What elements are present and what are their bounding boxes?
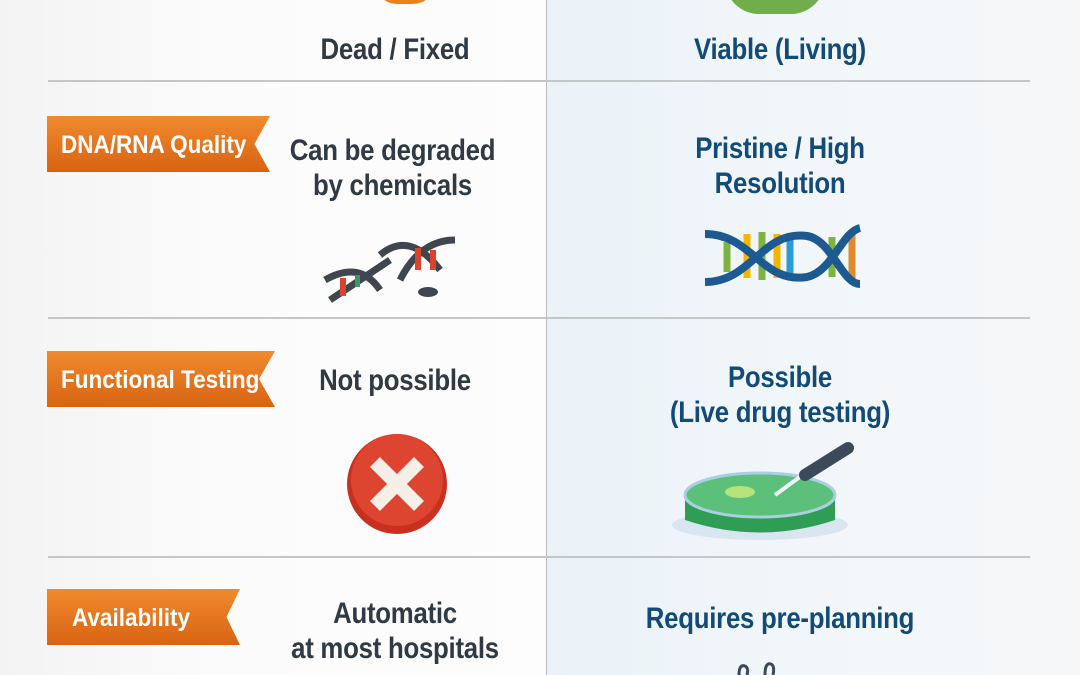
text: degraded <box>290 134 495 202</box>
text: pristine: Resolution <box>715 167 845 200</box>
icon: red X <box>347 434 447 534</box>
text: requires pre-planning: Requires pre-planning <box>646 602 914 635</box>
text: pristine <box>695 132 865 200</box>
text: possible <box>670 361 890 429</box>
text: dead / fixed: Dead / Fixed <box>321 33 469 66</box>
icon: green cell (top, cropped) <box>725 0 825 14</box>
text: not possible: Not possible <box>319 364 471 397</box>
text: degraded: Can be degraded <box>290 134 495 167</box>
icon: DNA <box>705 224 861 288</box>
label: DNA/RNA Quality <box>47 116 270 172</box>
text: viable: Viable (Living) <box>694 33 866 66</box>
text: pristine: Pristine / High <box>695 132 865 165</box>
label: Functional Testing <box>47 351 275 407</box>
icon: petri dish <box>672 442 854 540</box>
label: Availability <box>47 589 240 645</box>
left column background <box>0 0 546 675</box>
icon: partial puzzle (cropped) <box>738 662 776 675</box>
text: automatic <box>291 597 499 665</box>
icon: orange cell (top, cropped) <box>375 0 435 4</box>
text: possible: (Live drug testing) <box>670 396 890 429</box>
label: Functional Testing: Functional Testing <box>61 366 259 394</box>
label: Availability: Availability <box>72 604 190 632</box>
icon: broken DNA <box>323 236 455 303</box>
label: DNA/RNA Quality: DNA/RNA Quality <box>61 131 246 159</box>
right column background <box>547 0 1080 675</box>
text: degraded: by chemicals <box>313 169 472 202</box>
text: automatic: at most hospitals <box>291 632 499 665</box>
text: automatic: Automatic <box>333 597 457 630</box>
text: possible: Possible <box>728 361 832 394</box>
